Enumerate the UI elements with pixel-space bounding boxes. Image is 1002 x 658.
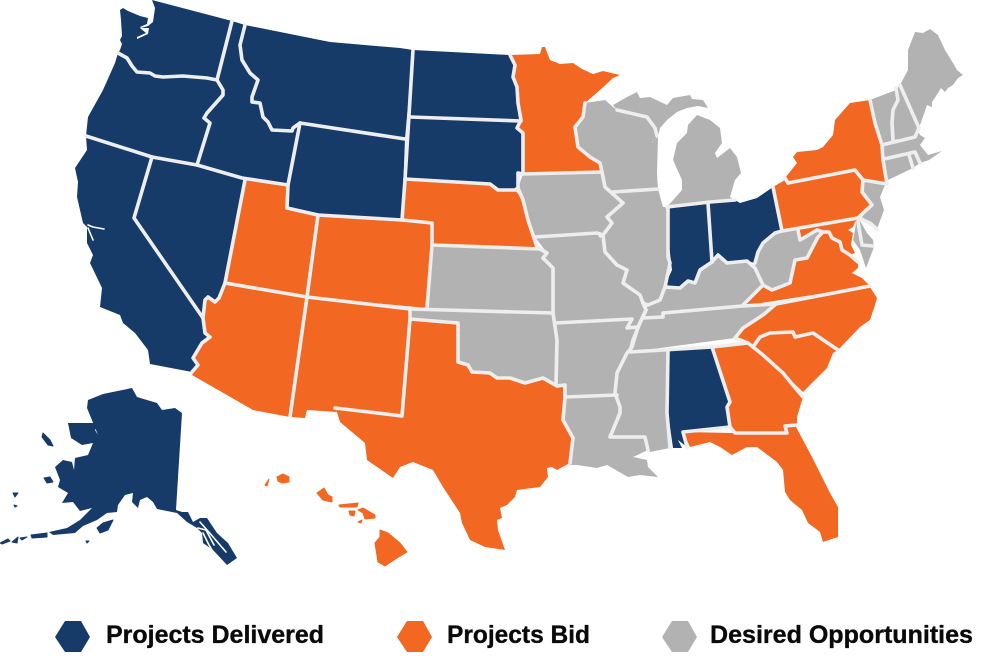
state: Massachusetts — [882, 130, 942, 163]
state: South Carolina — [752, 332, 838, 392]
state: Kentucky — [642, 255, 763, 319]
state: Alabama — [668, 347, 730, 448]
state: Mississippi — [610, 350, 670, 452]
state: Arizona — [192, 283, 307, 417]
state: North Dakota — [410, 50, 521, 120]
state: Louisiana — [563, 395, 658, 477]
state: New York — [785, 100, 887, 184]
state: Michigan lower peninsula — [667, 115, 741, 207]
state: Connecticut and Rhode Island — [883, 152, 920, 183]
state: Michigan upper peninsula — [613, 92, 708, 143]
state: Oklahoma — [410, 309, 557, 385]
state: Wisconsin — [575, 100, 658, 192]
state: Maine — [900, 29, 963, 128]
state: Montana — [240, 25, 413, 139]
state: Pennsylvania — [773, 170, 872, 231]
state: California — [75, 136, 210, 372]
state: Kansas — [427, 245, 553, 313]
state: Virginia — [742, 232, 870, 306]
legend item: Desired Opportunities: Desired Opportunities — [710, 621, 973, 649]
state: Tennessee — [630, 304, 776, 352]
state borders — [86, 21, 920, 463]
state: Washington — [118, 0, 232, 80]
legend — [55, 621, 973, 652]
state: Illinois — [600, 187, 670, 305]
state: Idaho — [197, 21, 300, 185]
state: Georgia — [712, 343, 803, 433]
state: New Mexico — [290, 297, 410, 418]
state: Maryland — [798, 219, 858, 256]
state: Ohio — [708, 187, 782, 263]
state: Colorado — [307, 215, 432, 308]
state: Nebraska — [402, 179, 540, 249]
state: Wyoming — [287, 123, 405, 220]
legend item: Projects Bid — [397, 621, 590, 652]
state: Arkansas — [555, 319, 638, 397]
state: Hawaii — [265, 474, 407, 566]
state: Indiana — [665, 203, 712, 287]
state: Delaware and eastern shore — [853, 221, 874, 268]
state: Oregon — [86, 53, 223, 165]
state: Minnesota — [510, 47, 620, 174]
state: New Hampshire — [892, 85, 919, 140]
state: New Jersey — [862, 180, 885, 229]
state: Nevada — [134, 157, 245, 318]
state: North Carolina — [735, 287, 877, 350]
state: Vermont — [870, 90, 898, 145]
legend item: Projects Bid: Projects Bid — [447, 621, 590, 649]
state: Texas — [336, 319, 573, 550]
state: Alaska — [0, 388, 237, 565]
state: Iowa — [518, 172, 623, 237]
state: West Virginia — [755, 229, 823, 290]
state: Florida — [683, 425, 838, 542]
state: South Dakota — [405, 117, 523, 190]
state: Utah — [225, 180, 318, 297]
state: Missouri — [535, 233, 646, 328]
legend item: Projects Delivered: Projects Delivered — [106, 621, 324, 649]
